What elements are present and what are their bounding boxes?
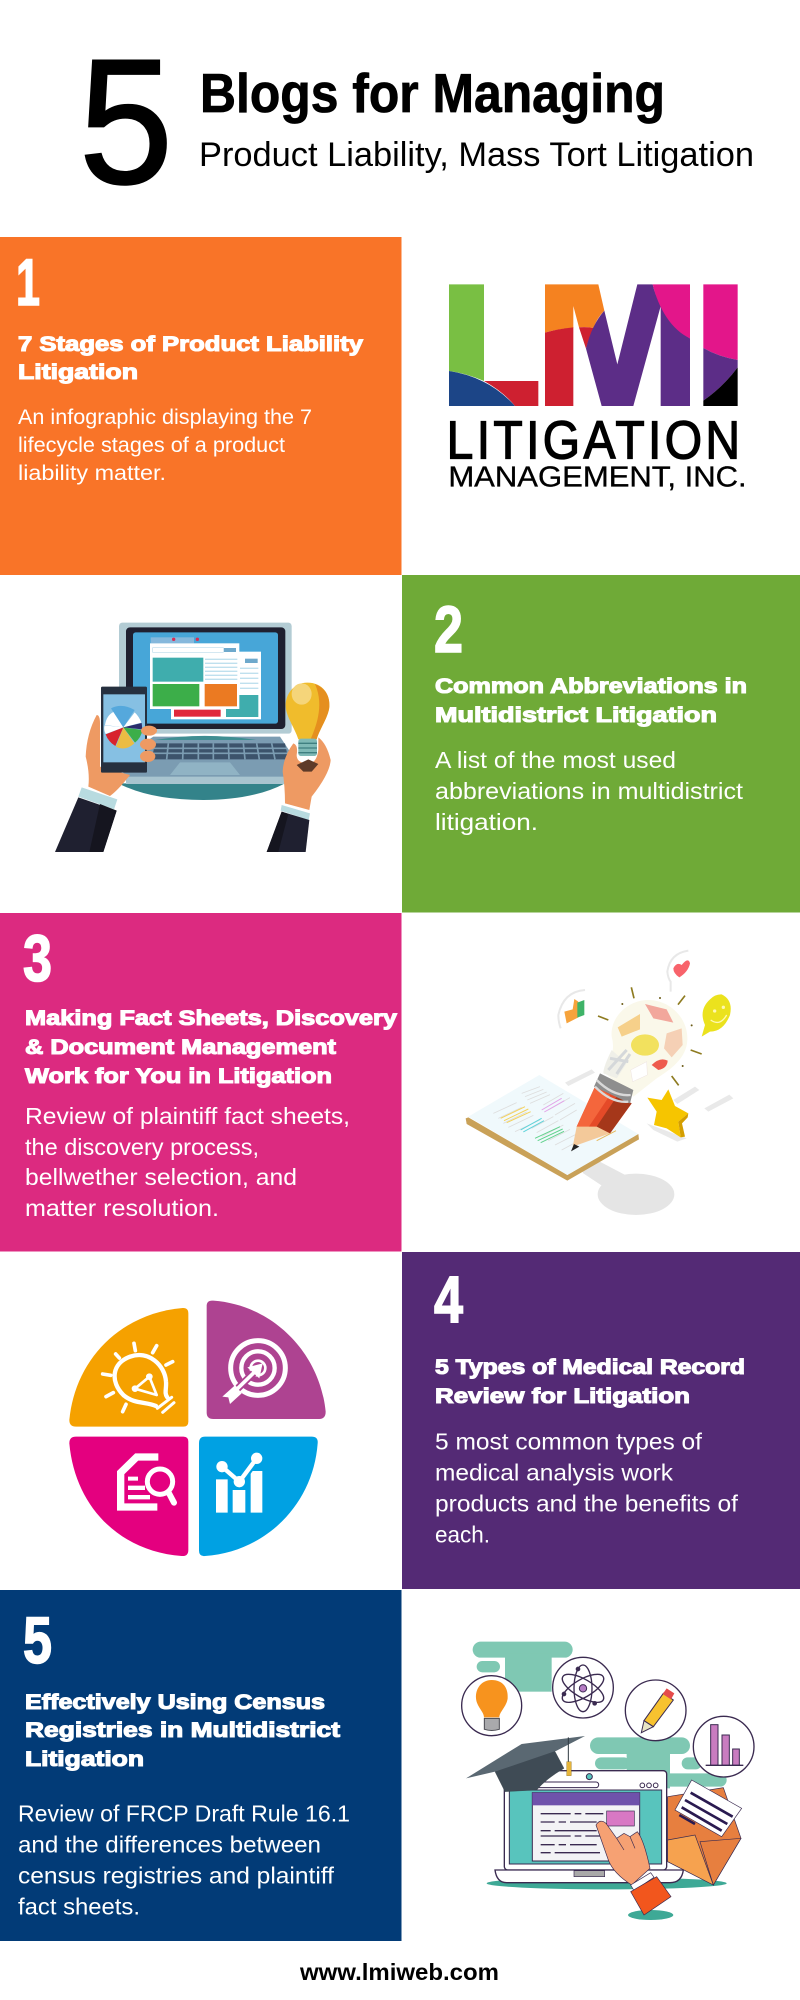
panel 2 heading: Common Abbreviations in xyxy=(435,675,747,698)
panel 2 body text xyxy=(435,747,744,835)
number 1: 1 xyxy=(16,245,40,319)
heading: blogs for managing: Blogs for Managing xyxy=(200,62,665,124)
icon: bar chart xyxy=(693,1716,754,1777)
panel 5 body text: fact sheets. xyxy=(18,1894,140,1920)
panel 4: purple xyxy=(402,1252,800,1589)
envelope xyxy=(668,1780,742,1885)
panel 5 heading xyxy=(25,1691,340,1771)
panel 1 heading: Litigation xyxy=(18,361,138,384)
laptop xyxy=(495,1771,683,1883)
icon: pencil xyxy=(625,1680,686,1741)
subheading: Product Liability, Mass Tort Litigation xyxy=(199,136,754,174)
panel 2: green xyxy=(402,575,800,912)
panel 5 body text: census registries and plaintiff xyxy=(18,1862,335,1888)
illustration: four quadrant icon circle xyxy=(69,1301,326,1556)
logo: LMI Litigation Management xyxy=(447,284,747,494)
icon: light bulb xyxy=(462,1676,522,1736)
panel 3 heading: Making Fact Sheets, Discovery xyxy=(25,1007,397,1030)
panel 5 body text xyxy=(18,1800,350,1920)
illustration: laptop, graduation cap, icons and envelope xyxy=(462,1642,754,1920)
footer: website: www.lmiweb.com xyxy=(299,1959,499,1985)
big number 5: 5 xyxy=(79,22,173,221)
panel 3 heading xyxy=(25,1007,397,1088)
panel 5 body text: Review of FRCP Draft Rule 16.1 xyxy=(18,1800,350,1826)
panel 4 body text: each. xyxy=(435,1522,490,1548)
panel 2 body text: litigation. xyxy=(435,809,538,835)
panel 4 body text xyxy=(435,1428,739,1548)
panel 3 heading: & Document Management xyxy=(25,1036,336,1059)
illustration: pencil, book and idea bulb xyxy=(466,951,733,1215)
panel 1 body text xyxy=(18,406,312,485)
panel 4 heading: Review for Litigation xyxy=(435,1385,690,1408)
panel 5 heading: Effectively Using Census xyxy=(25,1691,325,1714)
panel 1: orange xyxy=(0,237,402,575)
panel 5 heading: Registries in Multidistrict xyxy=(25,1719,340,1742)
panel 3 body text: matter resolution. xyxy=(25,1195,219,1221)
panel 5: navy xyxy=(0,1590,402,1941)
icon: atom xyxy=(553,1657,613,1718)
logo: LMI Litigation Management: LITIGATION xyxy=(447,410,740,470)
panel 3 body text: Review of plaintiff fact sheets, xyxy=(25,1103,350,1129)
quadrant: blue bar chart xyxy=(199,1437,318,1556)
number 3: 3 xyxy=(23,921,52,995)
panel 4 heading xyxy=(435,1356,745,1408)
panel 3 heading: Work for You in Litigation xyxy=(25,1065,332,1088)
pointing hand with sleeve xyxy=(596,1821,671,1915)
panel 1 body text: liability matter. xyxy=(18,462,166,485)
panel 3: pink xyxy=(0,913,402,1252)
number 2: 2 xyxy=(434,592,463,666)
number 4: 4 xyxy=(434,1262,463,1336)
title xyxy=(79,22,754,221)
panel 2 body text: A list of the most used xyxy=(435,747,676,773)
number 5: 5 xyxy=(23,1603,52,1677)
panel 1 heading xyxy=(18,333,363,384)
panel 4 body text: products and the benefits of xyxy=(435,1490,739,1516)
logo: LMI Litigation Management: MANAGEMENT, INC. xyxy=(448,462,747,494)
quadrant: orange bulb xyxy=(69,1308,188,1427)
graduation cap xyxy=(466,1736,585,1792)
panel 3 body text: the discovery process, xyxy=(25,1134,259,1160)
panel 4 heading: 5 Types of Medical Record xyxy=(435,1356,745,1379)
panel 1 body text: lifecycle stages of a product xyxy=(18,434,285,457)
quadrant: pink document search xyxy=(69,1437,188,1556)
panel 3 body text xyxy=(25,1103,350,1221)
panel 5 heading: Litigation xyxy=(25,1748,144,1771)
quadrant: purple target xyxy=(207,1301,326,1419)
panel 2 heading: Multidistrict Litigation xyxy=(435,704,717,727)
panel 4 body text: medical analysis work xyxy=(435,1460,674,1486)
panel 1 body text: An infographic displaying the 7 xyxy=(18,406,312,429)
panel 2 heading xyxy=(435,675,747,727)
panel 1 heading: 7 Stages of Product Liability xyxy=(18,333,363,356)
panel 5 body text: and the differences between xyxy=(18,1832,321,1858)
panel 4 body text: 5 most common types of xyxy=(435,1428,703,1454)
panel 2 body text: abbreviations in multidistrict xyxy=(435,778,744,804)
illustration: laptop with phone and light bulb xyxy=(55,623,331,852)
panel 3 body text: bellwether selection, and xyxy=(25,1164,297,1190)
